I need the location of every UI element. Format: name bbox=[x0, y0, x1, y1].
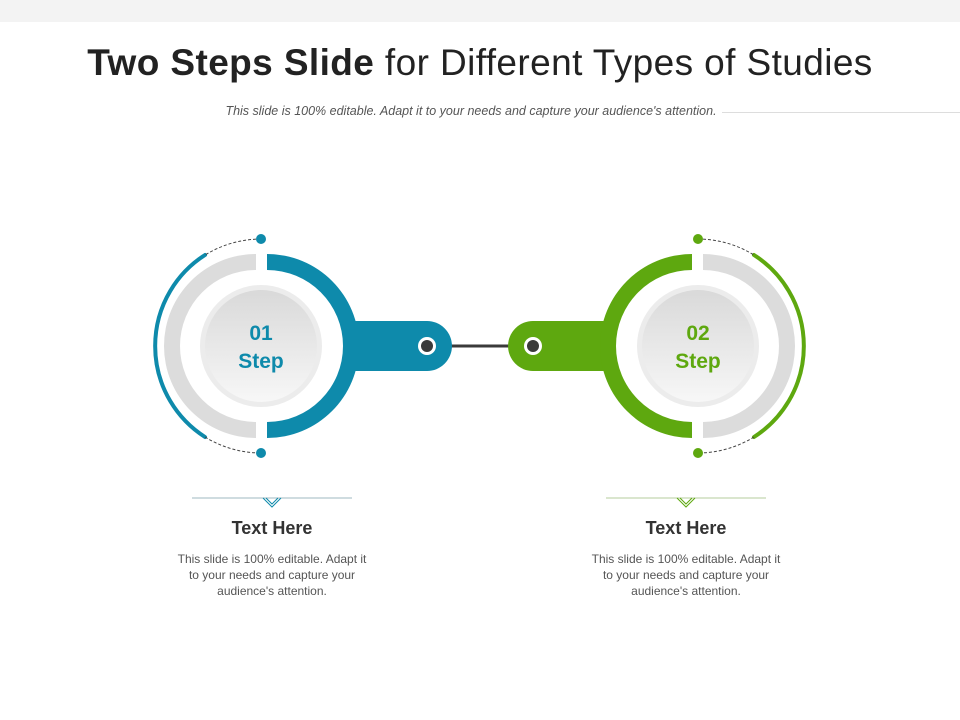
subtitle rule bbox=[722, 112, 960, 113]
divider markers bbox=[192, 497, 352, 499]
text block 1: Text Here bbox=[232, 518, 312, 538]
text block 2: to your needs and capture your bbox=[603, 568, 769, 582]
step 2: Step bbox=[675, 350, 721, 373]
text block 1 bbox=[178, 518, 366, 598]
connector line bbox=[427, 344, 533, 348]
text block 2 bbox=[592, 518, 780, 598]
step 2: 02 bbox=[686, 322, 710, 345]
step 1 bbox=[155, 234, 452, 458]
text block 2: audience's attention. bbox=[631, 584, 741, 598]
step 1: Step bbox=[238, 350, 284, 373]
text block 2: Text Here bbox=[646, 518, 726, 538]
text block 2: This slide is 100% editable. Adapt it bbox=[592, 552, 780, 566]
title: Two Steps Slide for Different Types of Studies bbox=[87, 42, 873, 83]
text block 1: to your needs and capture your bbox=[189, 568, 355, 582]
top band bbox=[0, 0, 960, 22]
subtitle: This slide is 100% editable. Adapt it to your needs and capture your audience's attention. bbox=[225, 104, 717, 118]
text block 1: audience's attention. bbox=[217, 584, 327, 598]
step 2 bbox=[508, 234, 804, 458]
step 1: 01 bbox=[249, 322, 273, 345]
text block 1: This slide is 100% editable. Adapt it bbox=[178, 552, 366, 566]
